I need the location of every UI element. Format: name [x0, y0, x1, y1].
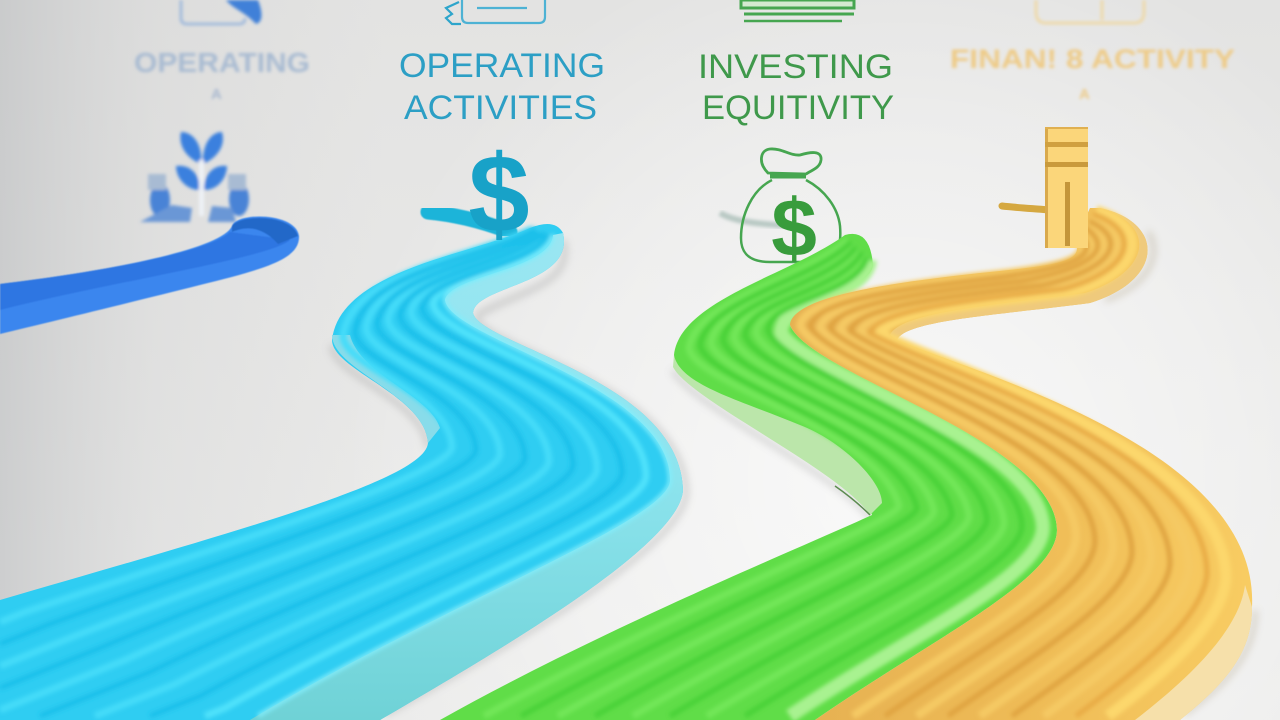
column 3: investing equitivity: [698, 0, 894, 127]
ribbon: blue operating: [0, 217, 299, 334]
tail: [428, 212, 510, 232]
heading: investing equitivity: INVESTING: [698, 48, 893, 86]
ribbon: cyan operating: [0, 212, 686, 720]
icon: money bag: [720, 149, 840, 274]
heading: operating activities: OPERATING: [399, 47, 605, 85]
column 1: blurred operating heading: [134, 0, 310, 103]
heading: investing equitivity: [698, 48, 894, 127]
side wall: [250, 233, 683, 720]
icon: plant and figures: [140, 132, 249, 222]
heading: financing activity: FINAN! 8 ACTIVITY: [950, 44, 1235, 74]
text: small letter: A: [211, 86, 222, 103]
heading: operating activities: [399, 47, 605, 127]
side wall: [673, 355, 882, 515]
icon: document with hand: [181, 0, 262, 24]
icon: banknote: [741, 0, 854, 21]
icon: money bag: $: [771, 183, 817, 274]
ribbon: green investing: [440, 234, 1057, 720]
text: small letter: A: [1079, 86, 1090, 103]
column 4: blurred financing heading: [950, 0, 1235, 103]
heading: investing equitivity: EQUITIVITY: [702, 89, 894, 127]
icon: pillar: [1002, 127, 1088, 248]
icon: note: [1036, 0, 1144, 23]
side wall: [890, 208, 1148, 340]
icon: certificate with hand: [446, 0, 545, 24]
grooves: [0, 229, 670, 716]
ribbon: orange financing: [790, 208, 1255, 720]
heading: operating activities: ACTIVITIES: [404, 89, 597, 127]
grooves: [484, 240, 1043, 716]
heading: operating: OPERATING: [134, 47, 310, 78]
icon: dollar sign: $: [468, 133, 530, 256]
column 2: operating activities: [399, 0, 605, 127]
grooves: [800, 211, 1226, 716]
